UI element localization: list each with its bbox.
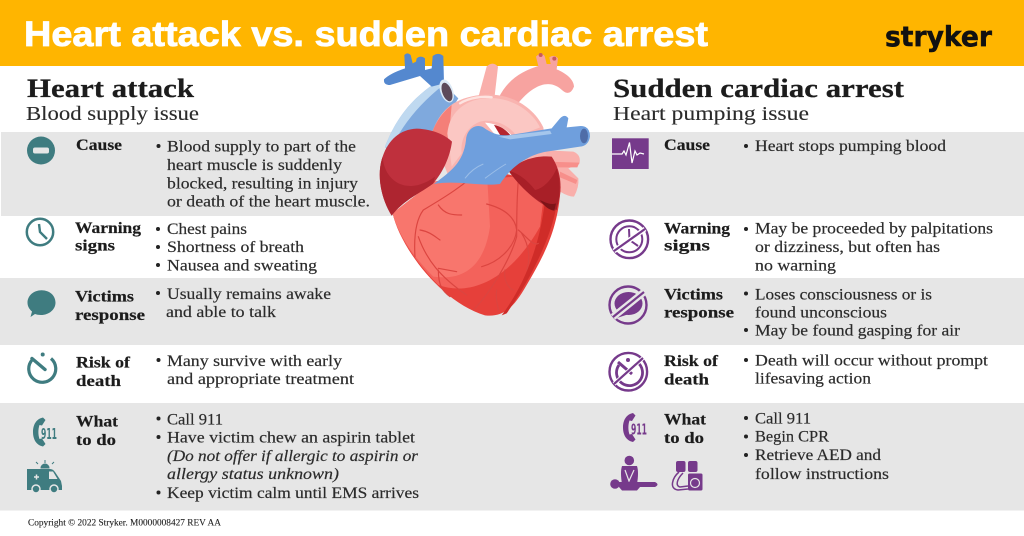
text: cause detail: [156, 138, 370, 211]
heart body: [393, 173, 561, 316]
title: Heart attack vs. sudden cardiac arrest: [24, 15, 708, 54]
label: warning signs: [75, 220, 141, 254]
icon: phone 911: [33, 418, 57, 446]
coronary vessels: [415, 167, 538, 310]
row: what to do: [610, 410, 889, 490]
row: cause: [27, 136, 370, 211]
panel: sudden cardiac arrest: [610, 73, 993, 490]
text: what to do detail: Begin CPR: [755, 429, 830, 446]
icon: crossed clock: [610, 220, 648, 258]
label: what to do: to do: [664, 430, 704, 447]
subheading: blood supply issue: Blood supply issue: [26, 103, 199, 125]
label: what to do: What: [76, 414, 119, 430]
text: victims response detail: Loses consciousness or is: [755, 286, 932, 303]
label: risk of death: [664, 353, 719, 388]
text: victims response detail: May be found gasping for air: [755, 323, 961, 340]
text: what to do detail: Retrieve AED and: [755, 447, 881, 464]
text: warning signs detail: Chest pains: [167, 221, 247, 238]
text: warning signs detail: no warning: [755, 258, 836, 274]
icon: minus circle: [27, 136, 55, 164]
header banner: [0, 0, 1024, 66]
text: warning signs detail: [744, 220, 993, 274]
text: warning signs detail: May be proceeded by palpitations: [755, 220, 993, 238]
icon: crossed stopwatch: [610, 353, 647, 391]
label: what to do: What: [664, 412, 707, 428]
label: cause: Cause: [664, 137, 710, 154]
text: victims response detail: and able to talk: [166, 304, 276, 321]
subheading: heart pumping issue: Heart pumping issue: [613, 103, 809, 125]
text: what to do detail: Call 911: [755, 410, 811, 428]
text: what to do detail: follow instructions: [755, 466, 889, 483]
label: warning signs: [664, 220, 730, 255]
row: cause: [612, 137, 946, 169]
text: risk of death detail: lifesaving action: [755, 370, 871, 388]
row: risk of death: [29, 352, 355, 390]
text: risk of death detail: [744, 352, 989, 388]
text: what to do detail: [156, 411, 419, 502]
label: victims response: [664, 286, 734, 322]
upper pink body: [432, 95, 547, 180]
label: warning signs: signs: [75, 238, 115, 254]
text: cause detail: heart muscle is suddenly: [167, 157, 342, 174]
icon: phone 911: [623, 413, 647, 442]
text: what to do detail: allergy status unknown): [167, 466, 339, 483]
stryker logo: stryker: [885, 20, 992, 53]
label: what to do: to do: [76, 432, 116, 449]
icon: stopwatch: [29, 352, 56, 382]
panel: heart attack: [26, 73, 419, 502]
label: what to do: [76, 414, 119, 449]
label: risk of death: [76, 354, 131, 390]
icon: cpr figure: [610, 456, 658, 490]
heading: sudden cardiac arrest: Sudden cardiac arrest: [613, 73, 904, 103]
heart illustration: [380, 53, 590, 316]
icon: phone 911: 911: [631, 420, 647, 438]
label: victims response: Victims: [75, 288, 134, 306]
icon: speech bubble: [28, 290, 56, 317]
right atrium dark: [380, 129, 452, 216]
grey row bands: [0, 132, 1024, 510]
label: risk of death: Risk of: [76, 354, 131, 372]
icon: ecg square: [612, 138, 649, 169]
text: risk of death detail: Death will occur without prompt: [755, 352, 989, 369]
row: victims response: [28, 286, 331, 324]
label: warning signs: Warning: [75, 220, 141, 237]
pulmonary trunk: [434, 116, 590, 185]
label: cause: Cause: [76, 137, 122, 154]
label: victims response: response: [664, 305, 734, 322]
text: risk of death detail: and appropriate treatment: [167, 371, 355, 388]
text: warning signs detail: Nausea and sweating: [167, 258, 317, 274]
text: what to do detail: Have victim chew an aspirin tablet: [167, 430, 416, 447]
label: warning signs: signs: [664, 238, 710, 255]
pulmonary branches behind: [530, 150, 580, 197]
text: what to do detail: [744, 410, 889, 483]
left atrium dark: [508, 156, 561, 211]
text: cause detail: Heart stops pumping blood: [755, 138, 946, 155]
text: victims response detail: [156, 286, 331, 321]
copyright: Copyright © 2022 Stryker. M0000008427 REV AA: [28, 518, 222, 528]
icon: aed: [672, 461, 702, 490]
icon: ambulance: [27, 460, 62, 493]
text: risk of death detail: [156, 353, 355, 388]
label: victims response: [75, 288, 145, 324]
label: risk of death: Risk of: [664, 353, 719, 370]
heading: heart attack: Heart attack: [27, 73, 194, 103]
text: what to do detail: Call 911: [167, 411, 223, 428]
icon: phone 911: 911: [41, 425, 57, 443]
row: risk of death: [610, 352, 989, 391]
row: warning signs: [27, 219, 317, 274]
text: risk of death detail: Many survive with early: [167, 353, 342, 370]
row: warning signs: [610, 220, 993, 274]
row: victims response: [610, 286, 961, 340]
text: victims response detail: [744, 286, 961, 340]
label: risk of death: death: [76, 373, 121, 390]
label: risk of death: death: [664, 371, 709, 388]
text: cause detail: blocked, resulting in injury: [167, 176, 358, 192]
text: what to do detail: (Do not offer if allergic to aspirin or: [167, 448, 419, 465]
superior vena cava: [385, 80, 458, 153]
label: victims response: Victims: [664, 286, 723, 303]
icon: crossed speech bubble: [610, 286, 646, 324]
label: warning signs: Warning: [664, 220, 730, 237]
label: what to do: [664, 412, 707, 447]
text: cause detail: or death of the heart muscle.: [167, 194, 370, 211]
text: what to do detail: Keep victim calm until EMS arrives: [167, 485, 419, 502]
label: victims response: response: [75, 307, 145, 324]
text: victims response detail: Usually remains awake: [167, 286, 331, 303]
vein branches top: [384, 53, 444, 87]
text: warning signs detail: [156, 221, 317, 274]
row: what to do: [27, 411, 419, 502]
icon: clock: [27, 219, 53, 245]
aortic arch branches: [477, 64, 498, 103]
text: warning signs detail: or dizziness, but often has: [755, 239, 940, 256]
text: victims response detail: found unconscious: [755, 304, 887, 321]
text: warning signs detail: Shortness of breath: [167, 239, 304, 256]
text: cause detail: Blood supply to part of the: [167, 138, 356, 156]
